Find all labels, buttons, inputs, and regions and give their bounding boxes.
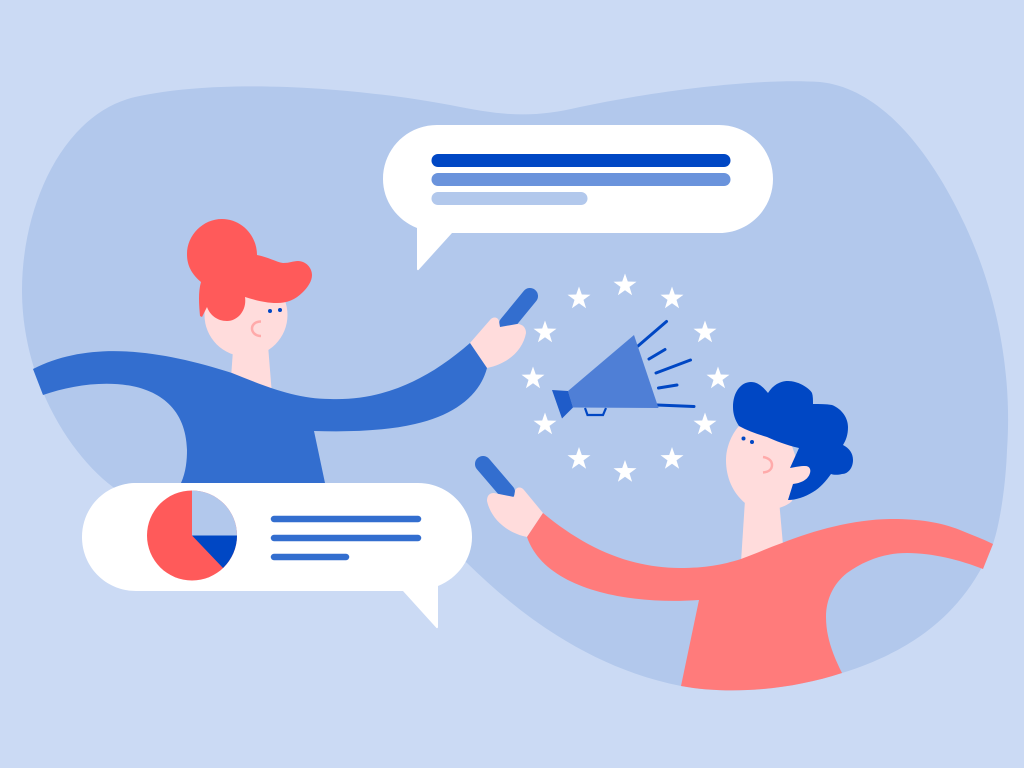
man nose — [763, 457, 772, 472]
megaphone sound lines — [638, 322, 694, 406]
megaphone with stars — [522, 274, 730, 482]
ring of stars — [522, 274, 730, 482]
woman face — [204, 274, 288, 356]
text line dark — [432, 154, 730, 167]
man sweater — [527, 513, 993, 690]
man ear — [789, 466, 810, 484]
man eyes — [742, 436, 754, 444]
megaphone handle — [585, 408, 606, 415]
woman neck — [231, 345, 272, 395]
woman hand — [470, 317, 526, 368]
man — [483, 381, 993, 690]
woman phone — [507, 296, 530, 324]
bottom speech bubble — [82, 483, 472, 628]
woman nose — [252, 322, 261, 336]
man phone — [483, 464, 507, 492]
background blob — [22, 81, 1008, 690]
woman eyes — [268, 308, 282, 313]
megaphone rear — [552, 390, 573, 418]
pie chart — [147, 490, 237, 580]
text line medium — [432, 173, 730, 186]
top speech bubble — [383, 125, 773, 270]
text line light — [432, 192, 588, 205]
chart legend lines — [274, 519, 418, 557]
man neck — [741, 500, 783, 562]
woman — [33, 219, 530, 483]
woman sweater — [33, 343, 487, 483]
woman hair — [187, 219, 312, 321]
megaphone body — [568, 335, 658, 408]
man hair — [733, 381, 853, 500]
man face — [726, 425, 800, 510]
man hand — [487, 487, 543, 537]
